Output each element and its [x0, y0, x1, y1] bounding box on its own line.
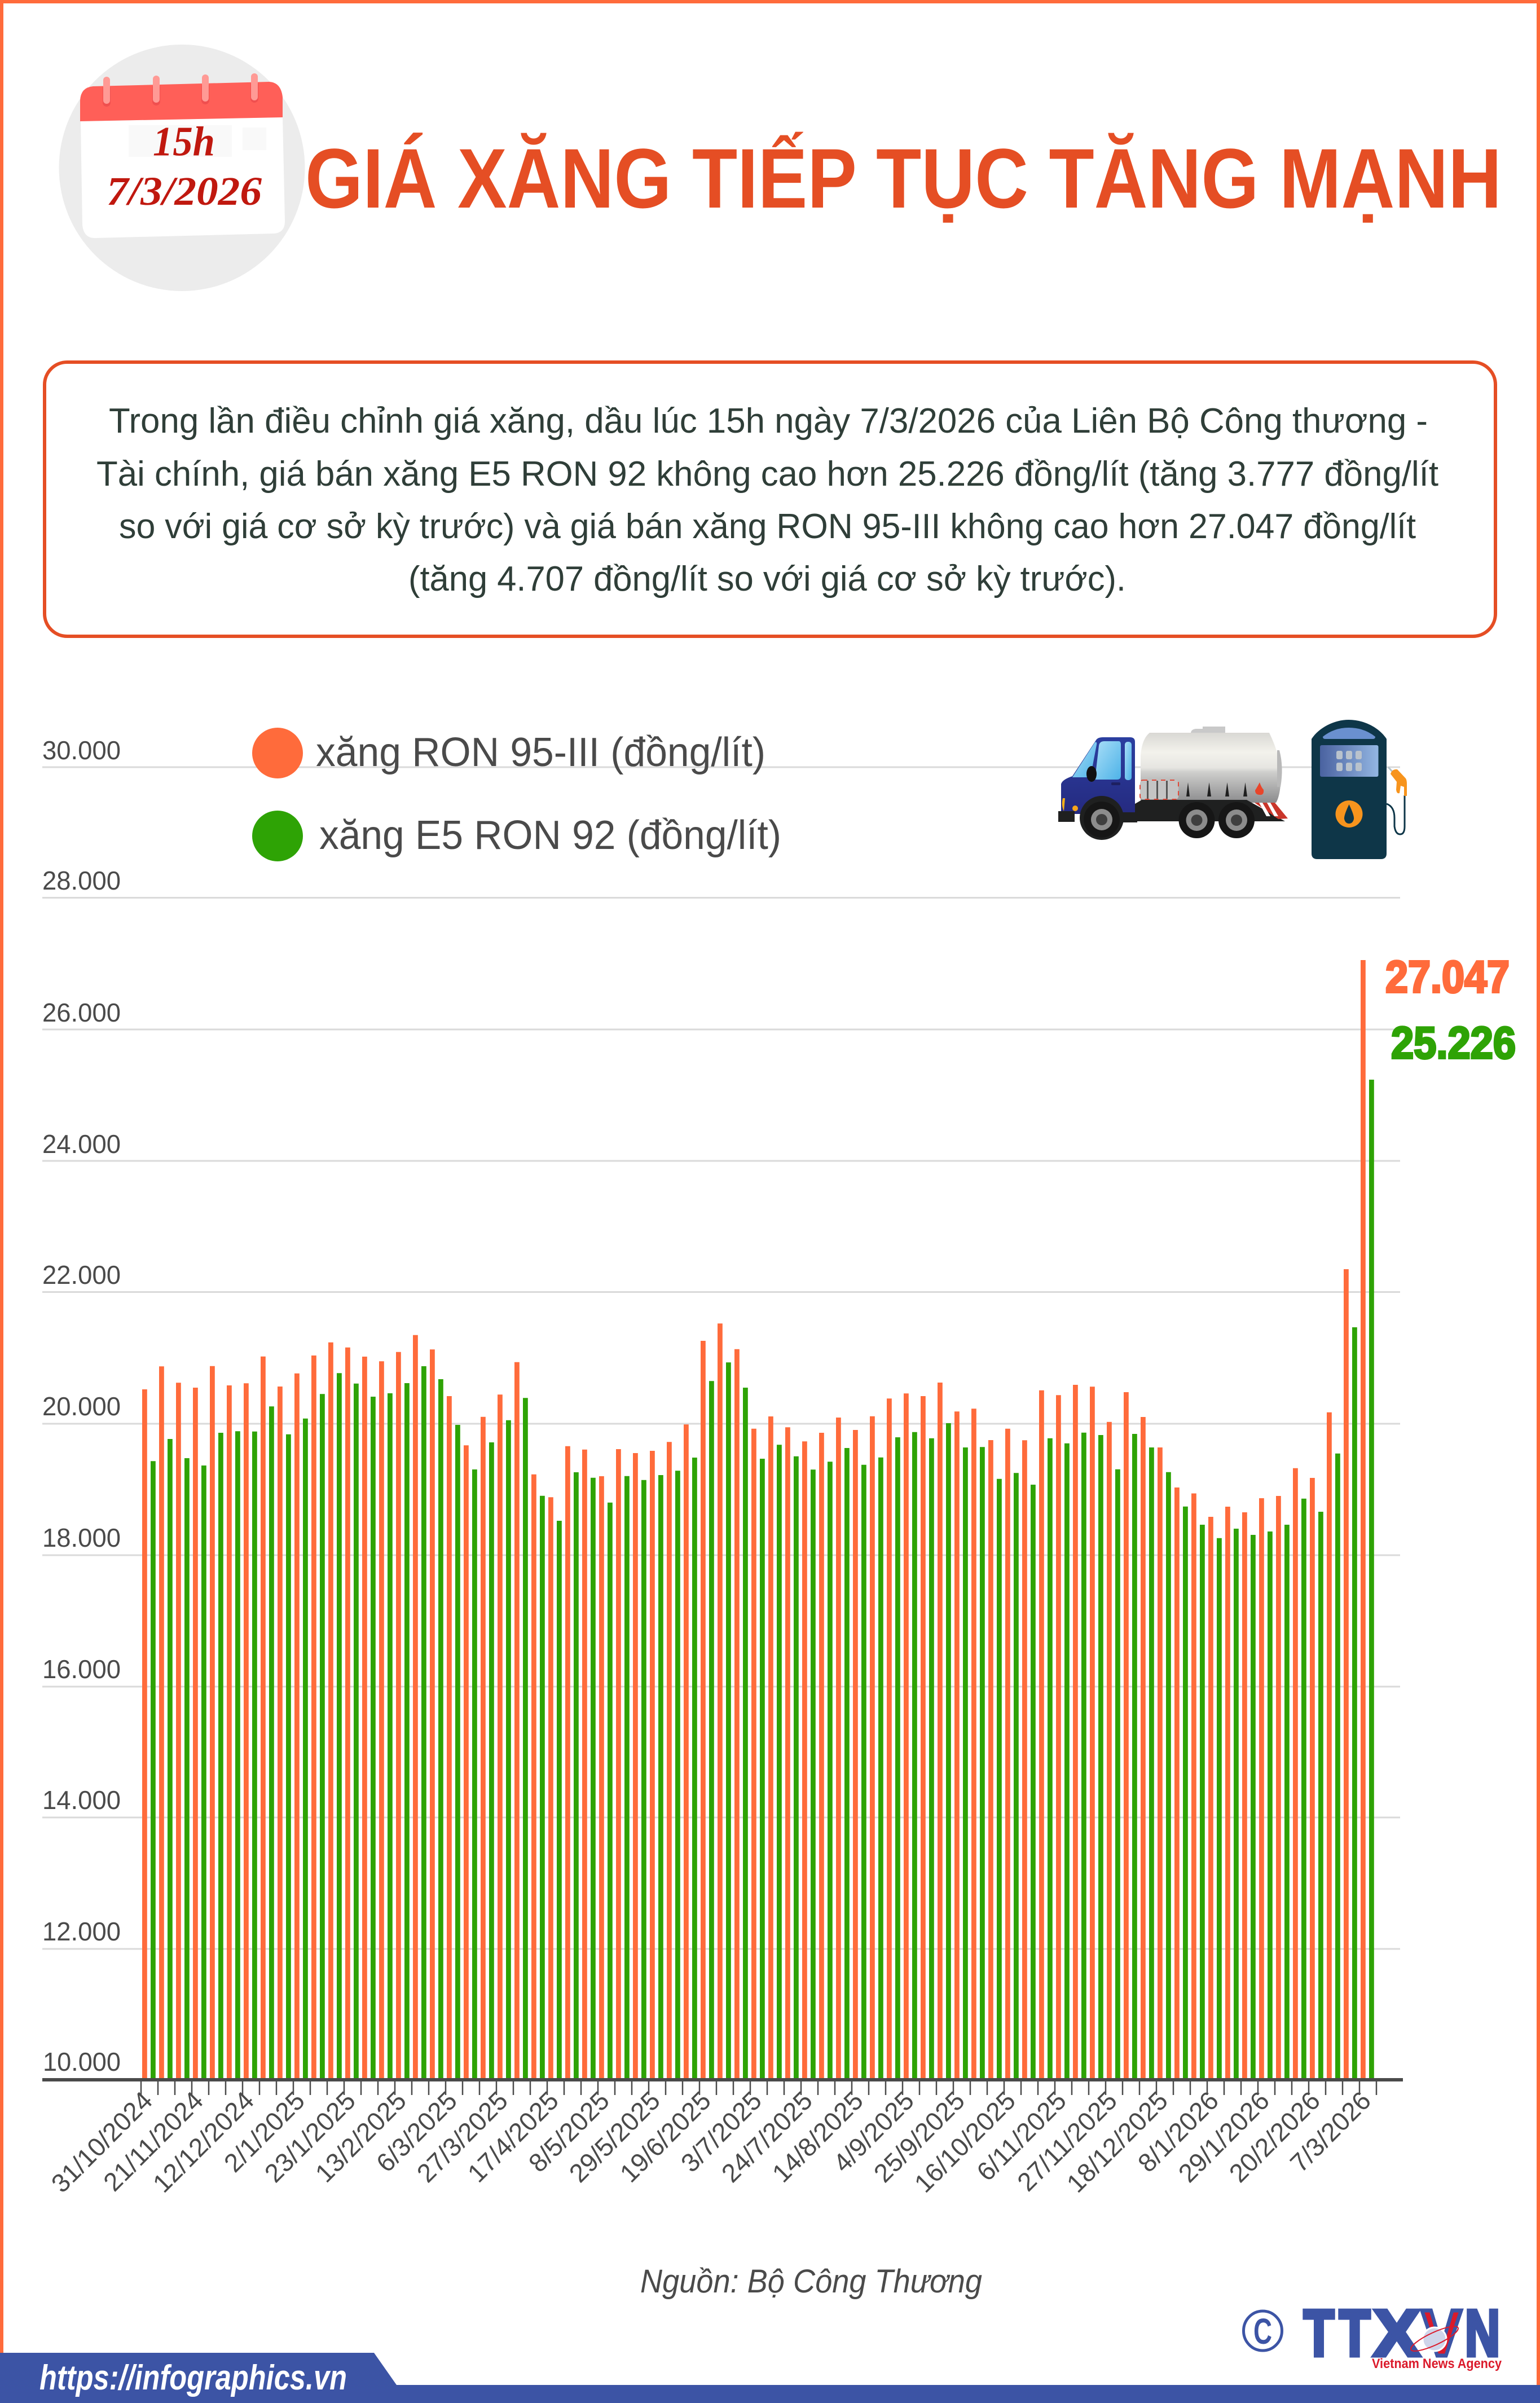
icon: calendar with date: 15h [153, 118, 215, 165]
source note: Nguồn: Bộ Công Thương [640, 2263, 982, 2300]
logo: TTXVN: C [1253, 2311, 1272, 2352]
chart: x axis date labels: 6/3/2025 [371, 2085, 463, 2178]
chart: x axis date labels: 23/1/2025 [259, 2085, 361, 2188]
icon: calendar with date [59, 45, 305, 291]
footer banner: https://infographics.vn [39, 2358, 347, 2397]
footer banner [0, 2353, 1540, 2403]
panel: summary text box [45, 362, 1495, 636]
chart: E5 RON 92 bars [153, 1080, 1371, 2078]
chart: x axis date labels: 24/7/2025 [716, 2085, 818, 2188]
icon: tanker truck [1058, 727, 1288, 840]
panel: summary text box: (tăng 4.707 đồng/lít so với giá cơ sở kỳ trước). [408, 560, 1126, 598]
chart: x axis date labels: 7/3/2026 [1284, 2085, 1376, 2178]
chart: x axis date labels: 27/3/2025 [411, 2085, 513, 2188]
icon: calendar with date: 7/3/2026 [107, 169, 262, 214]
chart: x axis date labels: 2/1/2025 [218, 2085, 310, 2178]
value label: E5 RON 92: 25.226 [1391, 1018, 1516, 1068]
legend: xăng E5 RON 92 (đồng/lít) [319, 813, 781, 858]
chart: y-axis labels: 12.000 [42, 1917, 121, 1946]
chart: x axis date labels: 20/2/2026 [1224, 2085, 1326, 2188]
chart: x axis date labels: 29/1/2026 [1173, 2085, 1275, 2188]
chart: x axis date labels: 3/7/2025 [675, 2085, 767, 2178]
logo: TTXVN: T [1339, 2296, 1370, 2370]
panel: summary text box: Tài chính, giá bán xăng E5 RON 92 không cao hơn 25.226 đồng/lít (tăng 3.777 đồng/lít [96, 455, 1438, 494]
chart: x axis date labels: 29/5/2025 [564, 2085, 666, 2188]
chart: y-axis labels: 18.000 [42, 1523, 121, 1552]
chart: x axis ticks [141, 2081, 1376, 2095]
chart: x axis date labels [46, 2085, 1376, 2198]
chart: y-axis labels: 28.000 [42, 866, 121, 895]
chart: y-axis labels: 20.000 [42, 1392, 121, 1421]
chart: x axis date labels: 18/12/2025 [1061, 2085, 1173, 2198]
chart: x axis date labels: 17/4/2025 [462, 2085, 564, 2188]
chart: x axis date labels: 14/8/2025 [767, 2085, 869, 2188]
chart: x axis date labels: 8/5/2025 [523, 2085, 615, 2178]
chart: y-axis labels [42, 736, 121, 2076]
legend [252, 728, 781, 861]
chart: y-axis labels: 10.000 [43, 2047, 121, 2076]
chart: y-axis labels: 26.000 [42, 998, 121, 1027]
chart: x axis date labels: 27/11/2025 [1011, 2085, 1123, 2197]
chart: x axis date labels: 25/9/2025 [868, 2085, 970, 2188]
chart: y-axis labels: 16.000 [42, 1654, 121, 1684]
panel: summary text box: so với giá cơ sở kỳ trước) và giá bán xăng RON 95-III không cao hơn 27.047 đồng/lít [119, 507, 1416, 546]
chart: y-axis labels: 14.000 [42, 1785, 121, 1815]
chart: x axis date labels: 6/11/2025 [971, 2085, 1072, 2186]
logo: TTXVN: Vietnam News Agency [1372, 2356, 1502, 2371]
chart: x axis date labels: 31/10/2024 [46, 2085, 158, 2198]
chart: RON 95-III bars [144, 960, 1363, 2078]
chart: x axis date labels: 12/12/2024 [147, 2085, 259, 2198]
chart: x axis line [42, 2078, 1403, 2081]
logo: TTXVN: T [1304, 2296, 1334, 2370]
chart: horizontal grid lines [42, 766, 1400, 1949]
logo: TTXVN [1243, 2296, 1502, 2371]
chart: x axis date labels: 19/6/2025 [614, 2085, 716, 2188]
chart: x axis date labels: 16/10/2025 [909, 2085, 1021, 2198]
logo: TTXVN: V [1422, 2296, 1462, 2370]
chart: y-axis labels: 22.000 [42, 1260, 121, 1289]
logo: TTXVN: N [1465, 2296, 1500, 2370]
chart: x axis date labels: 4/9/2025 [828, 2085, 919, 2178]
chart: y-axis labels: 24.000 [42, 1129, 121, 1159]
panel: summary text box: Trong lần điều chỉnh giá xăng, dầu lúc 15h ngày 7/3/2026 của Liên Bộ Công thương - [109, 402, 1428, 441]
chart: y-axis labels: 30.000 [42, 736, 121, 765]
legend: xăng RON 95-III (đồng/lít) [316, 730, 765, 775]
chart: x axis date labels: 21/11/2024 [98, 2085, 209, 2197]
icon: fuel pump [1312, 720, 1407, 859]
chart: x axis date labels: 13/2/2025 [310, 2085, 412, 2188]
chart: x axis date labels: 8/1/2026 [1132, 2085, 1224, 2178]
value label: RON 95-III: 27.047 [1385, 952, 1510, 1002]
logo: TTXVN: X [1374, 2296, 1420, 2370]
